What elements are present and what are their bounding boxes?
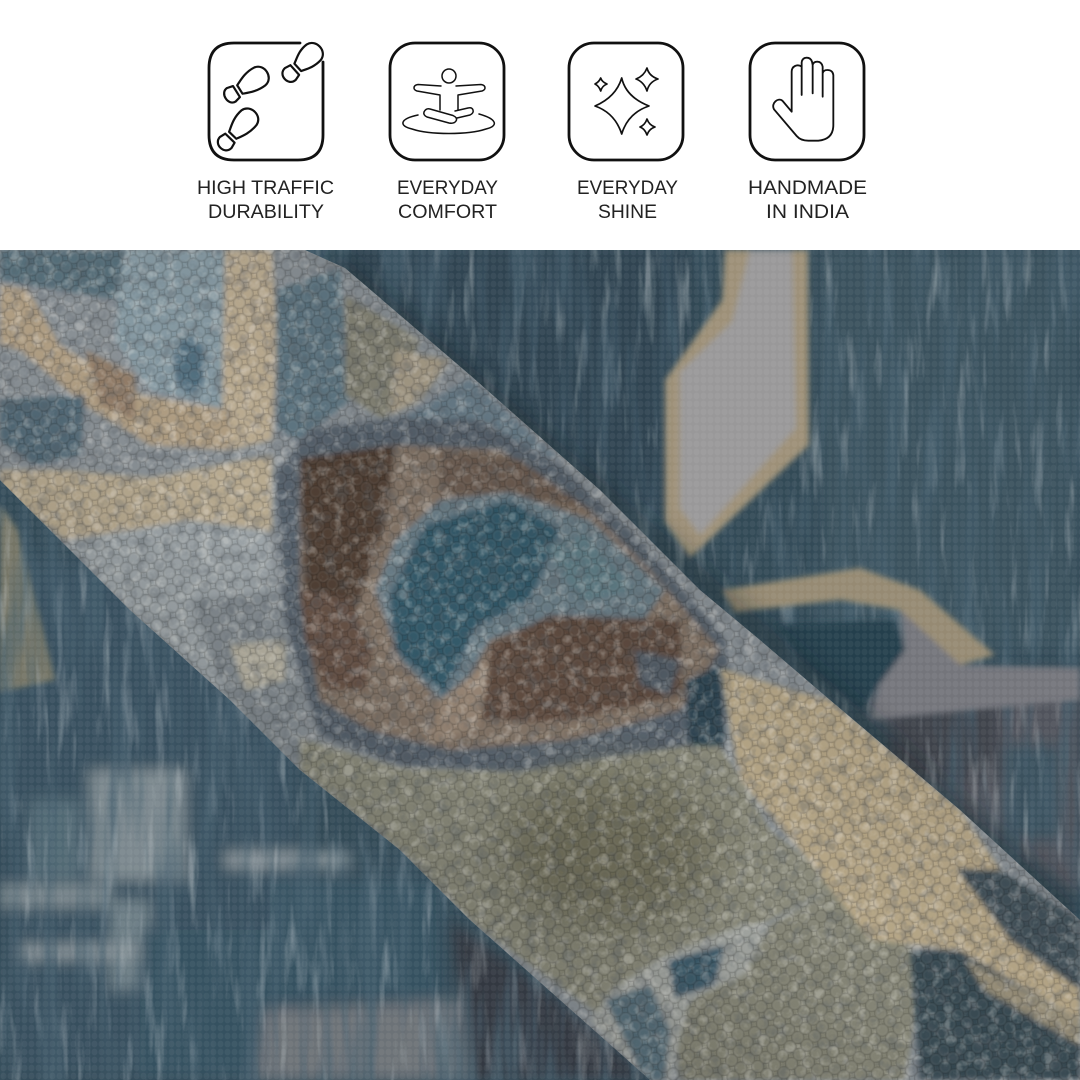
knot texture <box>0 250 1080 1080</box>
pattern: brown medallion <box>275 418 735 775</box>
label: high traffic durability: HIGH TRAFFIC <box>197 177 334 199</box>
label: everyday comfort: EVERYDAY <box>397 177 498 199</box>
icon: meditation figure <box>390 43 504 160</box>
rolled rug cylinder <box>0 250 1080 1080</box>
shading: olive darker centre <box>500 770 720 930</box>
background woven streaks <box>0 250 1080 1080</box>
photo: rolled rug <box>0 250 1080 1080</box>
label: high traffic durability: DURABILITY <box>208 201 324 223</box>
label: everyday shine: EVERYDAY <box>577 177 678 199</box>
label: handmade in india: IN INDIA <box>766 201 849 223</box>
shadow above roll <box>330 258 1080 920</box>
label: everyday shine <box>577 177 678 223</box>
icon: hand <box>750 43 864 160</box>
motif: gold and grey diamond <box>665 250 809 558</box>
label: everyday comfort <box>397 177 498 223</box>
pattern: olive section <box>300 738 925 1080</box>
label: handmade in india: HANDMADE <box>748 177 867 199</box>
pattern: upper left gold chevrons <box>0 250 560 770</box>
label: handmade in india <box>748 177 867 223</box>
weave texture <box>0 250 1080 1080</box>
motif: olive patch left <box>0 505 55 692</box>
icon: footprints <box>209 39 327 160</box>
label: everyday comfort: COMFORT <box>398 201 497 223</box>
label: high traffic durability <box>197 177 334 223</box>
pattern: gold section <box>720 668 1080 1080</box>
motif: gold outline lower right <box>722 568 1080 720</box>
icon: sparkles <box>569 43 683 160</box>
icon row <box>197 39 867 223</box>
rug base field <box>0 250 1080 1080</box>
label: everyday shine: SHINE <box>598 201 657 223</box>
pattern: small lower medallion <box>590 925 770 1080</box>
